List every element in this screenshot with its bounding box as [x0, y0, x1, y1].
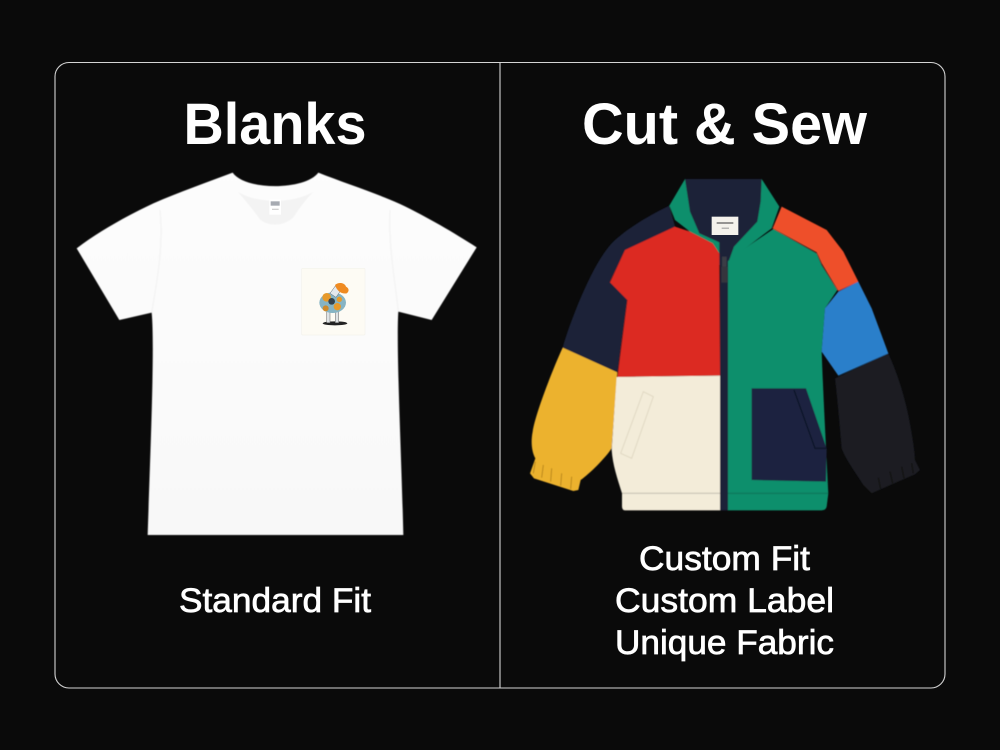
black sleeve — [835, 353, 920, 493]
red panel — [610, 227, 720, 377]
caption: custom features: Unique Fabric — [615, 624, 834, 662]
caption: custom features: Custom Label — [615, 582, 834, 620]
panel: blanks — [77, 92, 477, 620]
navy lining — [685, 179, 765, 265]
icon: colour-block jacket — [530, 179, 920, 510]
navy left shoulder and sleeve — [563, 206, 675, 373]
yellow cuff gathers — [533, 462, 572, 489]
icon: white t-shirt — [77, 173, 477, 535]
heading: Blanks: Blanks — [184, 92, 366, 157]
blue sleeve panel — [822, 282, 888, 376]
cream pocket welt — [621, 392, 653, 458]
heading: Cut & Sew: Cut & Sew — [582, 92, 868, 157]
zipper — [720, 253, 728, 510]
neck label — [712, 217, 738, 235]
caption: custom features: Custom Fit — [639, 540, 811, 578]
character — [319, 283, 349, 325]
caption: standard fit: Standard Fit — [179, 582, 372, 620]
green body — [727, 229, 837, 510]
caption: custom features — [615, 540, 834, 662]
orange shoulder — [773, 207, 858, 291]
cream panel — [612, 376, 721, 510]
neck label — [269, 199, 281, 215]
navy pocket — [752, 388, 827, 482]
collar — [669, 179, 719, 253]
comparison frame — [55, 62, 945, 688]
black cuff gathers — [878, 463, 913, 489]
yellow sleeve — [530, 348, 617, 491]
hem shading — [622, 491, 828, 495]
panel: cut and sew — [530, 92, 920, 662]
icon: pocket with character print — [302, 268, 365, 335]
